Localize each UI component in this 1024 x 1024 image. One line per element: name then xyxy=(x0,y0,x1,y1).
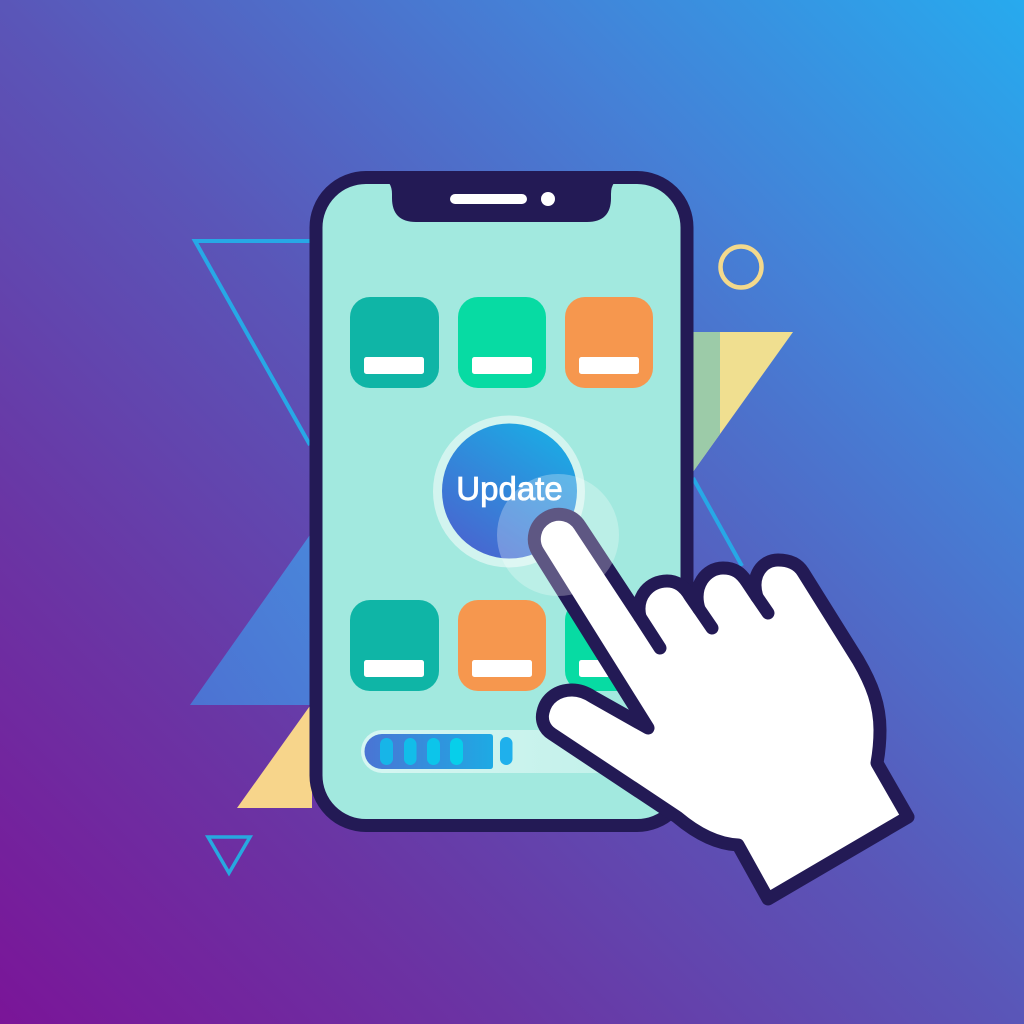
app icon: row 1 teal xyxy=(350,297,439,388)
app icon: row 2 orange xyxy=(458,600,546,691)
phone xyxy=(316,178,687,826)
update button xyxy=(433,416,585,568)
solid triangle: yellow xyxy=(237,703,312,808)
app icon: row 2 teal xyxy=(350,600,439,691)
solid triangle: blue xyxy=(190,532,312,705)
app icon: row 1 green xyxy=(458,297,546,388)
app icon: row 1 orange xyxy=(565,297,653,388)
outlined triangle: upper left xyxy=(195,241,310,445)
outlined triangle edge: right xyxy=(693,478,742,566)
solid triangle: right yellow-green xyxy=(690,332,793,476)
pointing hand xyxy=(534,514,908,899)
app icon: row 2 green xyxy=(565,600,653,691)
icon: yellow ring xyxy=(720,246,762,288)
hand fill and outline xyxy=(534,514,908,899)
touch ripple xyxy=(497,474,619,596)
speaker xyxy=(450,194,527,204)
phone body xyxy=(316,178,687,826)
progress bar xyxy=(361,730,621,773)
finger separators xyxy=(640,597,768,648)
phone notch xyxy=(380,178,623,222)
button label: Update xyxy=(456,470,563,507)
icon: small outlined triangle xyxy=(208,837,250,873)
camera xyxy=(541,192,555,206)
